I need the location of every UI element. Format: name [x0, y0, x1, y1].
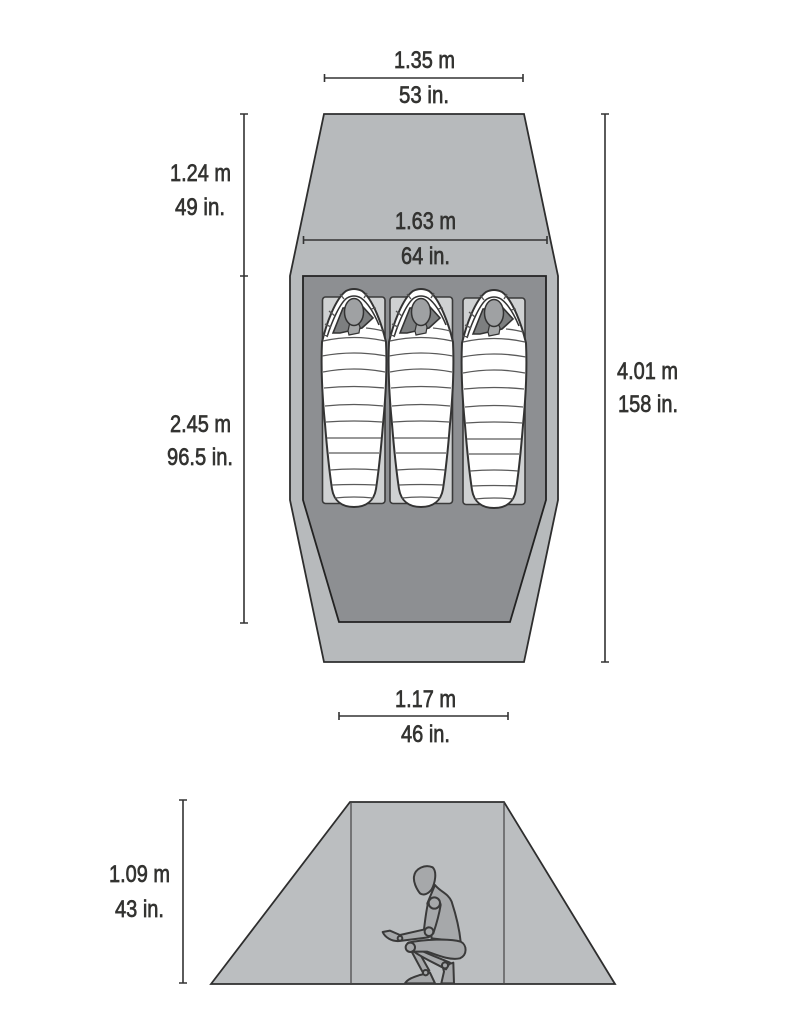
- sleeping bag 1: [322, 289, 386, 507]
- side profile: [211, 802, 615, 984]
- dimension: height 1.09 m / 43 in.: 1.09 m: [109, 861, 170, 888]
- dimension: roof width 1.35 m / 53 in.: 1.35 m: [394, 47, 455, 74]
- dimension: total length 4.01 m / 158 in.: 158 in.: [618, 391, 678, 418]
- dimension: roof width 1.35 m / 53 in.: [324, 47, 523, 109]
- tent floor plan: [290, 114, 558, 662]
- inner tent floor: [303, 276, 546, 622]
- dimension: vestibule length 1.24 m / 49 in.: [170, 114, 248, 276]
- dimension: inner length 2.45 m / 96.5 in.: 2.45 m: [170, 411, 231, 438]
- sleeping pad 3: [463, 298, 525, 504]
- dimension: vestibule length 1.24 m / 49 in.: 49 in.: [175, 194, 225, 221]
- dimension: end width 1.17 m / 46 in.: [339, 686, 508, 748]
- tent side view: [211, 802, 615, 984]
- dimension: inner length 2.45 m / 96.5 in.: [167, 276, 248, 623]
- sleeping bag 2: [389, 289, 453, 507]
- sleeping bag 3: [462, 290, 526, 508]
- dimension: total length 4.01 m / 158 in.: 4.01 m: [617, 358, 678, 385]
- sleeping pad 1: [322, 297, 385, 504]
- dimension: vestibule length 1.24 m / 49 in.: 1.24 m: [170, 160, 231, 187]
- dimension: inner width 1.63 m / 64 in.: 64 in.: [401, 243, 450, 270]
- dimension: inner width 1.63 m / 64 in.: 1.63 m: [395, 208, 456, 235]
- dimension: height 1.09 m / 43 in.: [109, 800, 187, 983]
- dimension: roof width 1.35 m / 53 in.: 53 in.: [399, 82, 449, 109]
- dimension: end width 1.17 m / 46 in.: 46 in.: [401, 721, 450, 748]
- crouching figure: [383, 866, 466, 983]
- dimension: total length 4.01 m / 158 in.: [601, 114, 678, 662]
- dimension: inner length 2.45 m / 96.5 in.: 96.5 in.: [167, 444, 233, 471]
- dimension: height 1.09 m / 43 in.: 43 in.: [115, 896, 164, 923]
- dimension: end width 1.17 m / 46 in.: 1.17 m: [395, 686, 456, 713]
- inner tent walls: [351, 802, 504, 984]
- sleeping pad 2: [390, 297, 452, 504]
- outer vestibule footprint: [290, 114, 558, 662]
- dimension: inner width 1.63 m / 64 in.: [304, 208, 547, 270]
